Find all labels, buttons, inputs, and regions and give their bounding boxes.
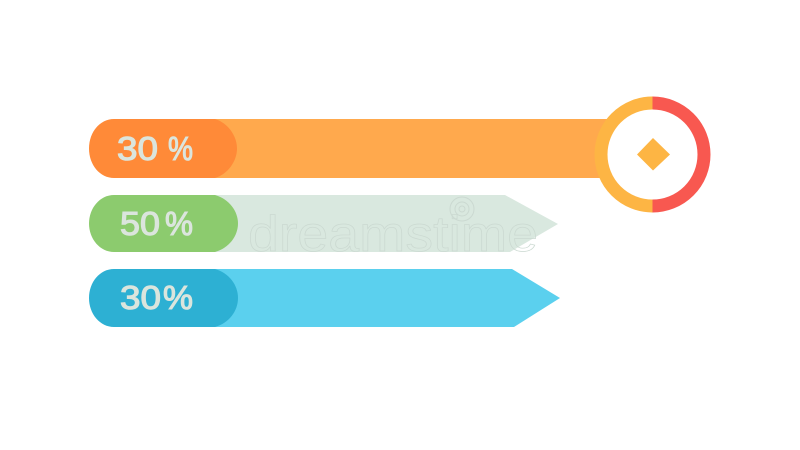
- green value: 50 %: [120, 205, 193, 242]
- blue value: 30 %: %: [163, 279, 193, 316]
- ring left half: [601, 103, 652, 206]
- blue pill: [89, 269, 238, 327]
- blue value: 30 %: [120, 279, 193, 316]
- orange value: 30 %: %: [168, 130, 193, 167]
- green value: 50 %: %: [165, 205, 193, 242]
- row 3: blue arrow: [89, 269, 560, 327]
- diamond icon: [637, 138, 670, 170]
- pale green arrow body: [190, 195, 558, 252]
- orange pill: [89, 119, 237, 178]
- green pill: [89, 195, 238, 252]
- white disc: [602, 104, 702, 204]
- blue value: 30 %: 30: [120, 279, 161, 316]
- blue arrow body: [190, 269, 560, 327]
- row 1: orange bar: [89, 119, 620, 178]
- orange value: 30 %: 30: [117, 130, 158, 167]
- watermark: dreamstime: [248, 206, 538, 262]
- ring right half: [652, 103, 704, 206]
- green value: 50 %: 50: [120, 205, 160, 242]
- orange value: 30 %: [117, 130, 193, 167]
- ring marker: [601, 103, 704, 206]
- orange bar body: [190, 119, 620, 178]
- row 2: green arrow: [89, 195, 558, 262]
